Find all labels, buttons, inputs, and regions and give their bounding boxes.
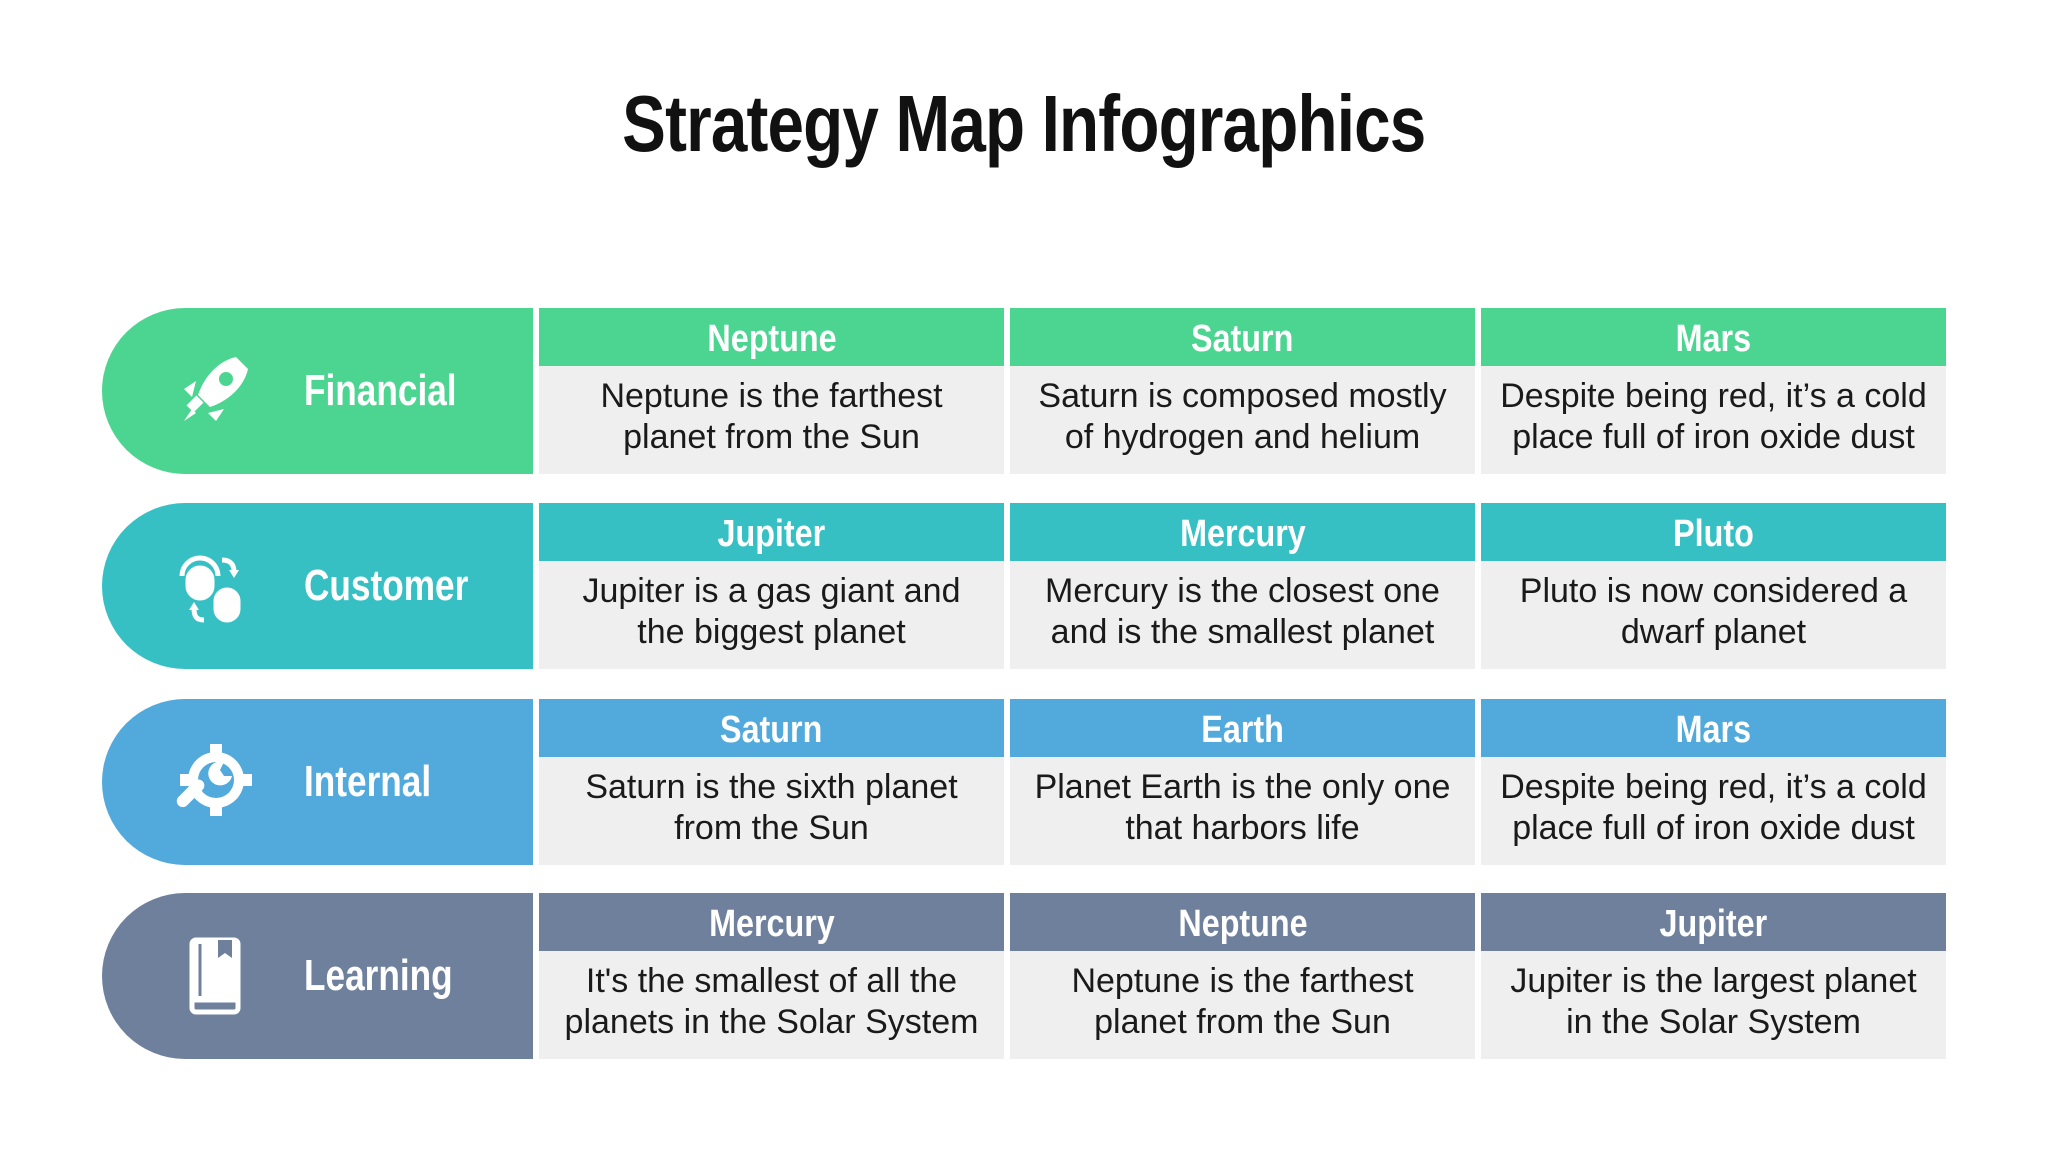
cell: Mars: [1481, 699, 1946, 865]
cell: Jupiter: the biggest planet: [637, 613, 906, 651]
cell: Mars: place full of iron oxide dust: [1512, 809, 1915, 847]
panel: Financial label: Financial: [304, 366, 457, 415]
row: Learning: [102, 893, 1946, 1059]
panel: Financial label: [102, 308, 533, 474]
panel: Learning label: [102, 893, 533, 1059]
cell: Earth: Planet Earth is the only one: [1035, 768, 1450, 806]
cell: Jupiter: in the Solar System: [1566, 1003, 1861, 1041]
cell: Saturn: Saturn: [720, 709, 823, 751]
cell: Mars: place full of iron oxide dust: [1512, 418, 1915, 456]
row: Financial: [102, 308, 1946, 474]
icon: customer support: [180, 556, 240, 622]
cell: Pluto: Pluto: [1673, 513, 1754, 555]
panel: Customer label: Customer: [304, 561, 468, 610]
cell: Mars: [1481, 308, 1946, 474]
cell: Mercury: It's the smallest of all the: [586, 962, 957, 1000]
cell: Mercury: [1010, 503, 1475, 669]
panel: Customer label: [102, 503, 533, 669]
icon: rocket: [184, 357, 248, 421]
cell: Jupiter: [1481, 893, 1946, 1059]
cell: Jupiter: Jupiter is a gas giant and: [582, 572, 961, 610]
cell: Mercury: Mercury: [1180, 513, 1305, 555]
cell: Jupiter: Jupiter: [718, 513, 825, 555]
cell: Saturn: Saturn: [1191, 318, 1294, 360]
cell: Saturn: Saturn is composed mostly: [1038, 377, 1447, 415]
panel: Internal label: [102, 699, 533, 865]
panel: Learning label: Learning: [304, 951, 453, 1000]
cell: Mercury: [539, 893, 1004, 1059]
icon: book: [190, 938, 240, 1014]
cell: Mars: Despite being red, it’s a cold: [1500, 377, 1927, 415]
cell: Neptune: Neptune is the farthest: [1071, 962, 1414, 1000]
row: Internal: [102, 699, 1946, 865]
cell: Pluto: [1481, 503, 1946, 669]
cell: Jupiter: [539, 503, 1004, 669]
cell: Jupiter: Jupiter: [1660, 903, 1767, 945]
cell: Saturn: from the Sun: [674, 809, 869, 847]
cell: Earth: [1010, 699, 1475, 865]
cell: Neptune: planet from the Sun: [623, 418, 920, 456]
cell: Saturn: [1010, 308, 1475, 474]
cell: Neptune: Neptune is the farthest: [600, 377, 943, 415]
cell: Earth: Earth: [1201, 709, 1284, 751]
title: Strategy Map Infographics: [622, 79, 1426, 168]
cell: Saturn: [539, 699, 1004, 865]
cell: Saturn: Saturn is the sixth planet: [585, 768, 958, 806]
cell: Mars: Mars: [1676, 318, 1751, 360]
cell: Mars: Mars: [1676, 709, 1751, 751]
cell: Neptune: planet from the Sun: [1094, 1003, 1391, 1041]
icon: gear wrench: [176, 744, 252, 816]
row: Customer: [102, 503, 1946, 669]
cell: Neptune: Neptune: [1178, 903, 1307, 945]
cell: Saturn: of hydrogen and helium: [1065, 418, 1420, 456]
cell: Jupiter: Jupiter is the largest planet: [1510, 962, 1917, 1000]
cell: Neptune: [1010, 893, 1475, 1059]
cell: Mercury: planets in the Solar System: [565, 1003, 978, 1041]
cell: Pluto: Pluto is now considered a: [1520, 572, 1907, 610]
cell: Mercury: Mercury is the closest one: [1045, 572, 1440, 610]
cell: Mercury: Mercury: [709, 903, 834, 945]
cell: Neptune: Neptune: [707, 318, 836, 360]
cell: Neptune: [539, 308, 1004, 474]
cell: Earth: that harbors life: [1125, 809, 1360, 847]
cell: Mercury: and is the smallest planet: [1051, 613, 1434, 651]
panel: Internal label: Internal: [304, 757, 431, 806]
cell: Pluto: dwarf planet: [1621, 613, 1806, 651]
cell: Mars: Despite being red, it’s a cold: [1500, 768, 1927, 806]
